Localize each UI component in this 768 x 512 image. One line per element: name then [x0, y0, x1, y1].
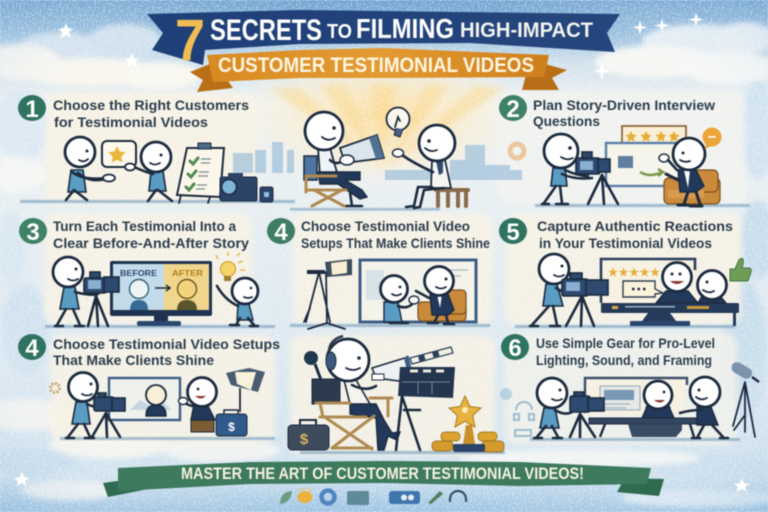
heading 5: Capture Authentic Reactions — [537, 218, 733, 234]
badge 3: 3 — [26, 219, 40, 246]
heading 6: Use Simple Gear for Pro-Level — [536, 335, 715, 351]
icon: blue case with dollar: $ — [228, 420, 235, 434]
heading 1 — [53, 97, 249, 130]
director chair — [316, 398, 392, 449]
icon: green thumbs up — [730, 258, 751, 281]
orange ribbon tails — [190, 60, 567, 92]
illustration: before and after monitor: BEFORE — [120, 268, 157, 278]
illustration: orange sofa with guest — [416, 266, 466, 324]
title line: filming: FILMING — [356, 13, 454, 44]
title banner — [147, 8, 620, 92]
badge 2 — [499, 95, 527, 123]
illustration: two laughing guests — [656, 262, 726, 303]
heading 3 — [53, 218, 249, 251]
center top illustration: director and interviewee — [304, 108, 468, 208]
badge 2: 2 — [506, 96, 520, 123]
heading 3: Clear Before-And-After Story — [53, 235, 249, 251]
trophy and coins — [432, 396, 504, 452]
city skyline — [233, 142, 522, 180]
pale side icons — [500, 388, 534, 436]
section 3 — [19, 218, 258, 326]
illustration: camera operator — [66, 372, 125, 438]
badge 5: 5 — [506, 219, 520, 246]
illustration: monitor with presenter — [109, 378, 180, 420]
illustration: camera operator — [53, 257, 119, 326]
title line: secrets: SECRETS — [210, 14, 322, 47]
illustration: interviewer — [380, 276, 419, 323]
heading 4 repeated: Choose Testimonial Video Setups — [53, 336, 280, 352]
heading 4 repeated — [53, 336, 280, 368]
lightbulb — [386, 108, 410, 137]
icon: bulb — [298, 488, 312, 503]
illustration: pointing figure — [217, 278, 258, 326]
heading 2: Questions — [533, 113, 600, 129]
section 4 repeated — [18, 334, 280, 438]
illustration: studio light — [304, 259, 352, 329]
illustration: review monitor — [601, 259, 739, 326]
badge 5 — [499, 218, 527, 246]
icon: gear — [510, 144, 524, 158]
section 4 — [267, 218, 490, 329]
illustration: checklist board — [177, 143, 224, 203]
icon: headset — [450, 491, 466, 502]
director chair — [306, 176, 346, 206]
heading 4: Setups That Make Clients Shine — [301, 235, 490, 251]
icon: orange speech bubble — [702, 128, 722, 149]
heading 4 — [301, 218, 490, 251]
badge 1 — [18, 95, 46, 123]
badge 4 repeated: 4 — [25, 335, 39, 362]
illustration: camera operator — [530, 254, 608, 326]
heading 4 repeated: That Make Clients Shine — [53, 352, 214, 368]
badge 4 — [267, 218, 295, 246]
subtitle: CUSTOMER TESTIMONIAL VIDEOS — [218, 54, 534, 77]
badge 3 — [19, 218, 47, 246]
central sunburst glow — [234, 40, 534, 190]
icon: blue case with dollar — [216, 410, 247, 436]
icon: tan gear — [50, 384, 60, 392]
badge 1: 1 — [25, 96, 39, 123]
icon: leaf — [280, 491, 292, 504]
ground shadows — [20, 200, 750, 454]
badge 6: 6 — [508, 335, 522, 362]
seated director — [304, 112, 367, 206]
heading 6 — [536, 335, 715, 368]
illustration: camera operator — [534, 378, 604, 438]
heading 2: Plan Story-Driven Interview — [533, 97, 715, 113]
illustration: desk and guests — [589, 377, 728, 438]
icon: dark case with dollar — [288, 420, 329, 450]
heading 6: Lighting, Sound, and Framing — [536, 352, 712, 368]
badge 4: 4 — [274, 219, 288, 246]
illustration: boom microphone — [729, 360, 759, 437]
camera tripod — [396, 396, 420, 450]
seated director — [326, 336, 400, 450]
badge 4 repeated — [18, 334, 46, 362]
section 6 — [500, 334, 759, 438]
badge 6 — [501, 334, 529, 362]
illustration: review monitor: ★★★★★ — [608, 267, 660, 279]
bottom green banner — [103, 461, 664, 497]
ribbon tails — [103, 478, 664, 497]
navy ribbon — [147, 10, 620, 65]
chair back — [312, 379, 340, 404]
banner text: MASTER THE ART OF CUSTOMER TESTIMONIAL VIDEOS! — [181, 465, 584, 483]
illustration: speaker on sofa — [659, 138, 720, 206]
icon: gear — [322, 490, 334, 504]
heading 1: for Testimonial Videos — [54, 114, 208, 130]
title line: high-impact: HIGH-IMPACT — [460, 19, 593, 42]
illustration: before and after monitor: AFTER — [172, 268, 203, 278]
heading 2 — [533, 97, 715, 129]
bottom icon row — [280, 488, 466, 505]
title line: to: TO — [327, 21, 352, 43]
heading 3: Turn Each Testimonial Into a — [53, 218, 236, 234]
illustration: camera operator — [542, 134, 618, 204]
heading 5: in Your Testimonial Videos — [539, 235, 712, 251]
numeral 7: 7 — [175, 8, 205, 73]
illustration: camera and bag — [220, 173, 273, 202]
soft panels backing — [44, 92, 745, 455]
seated interviewee — [392, 125, 468, 208]
icon: pill — [389, 491, 420, 504]
heading 1: Choose the Right Customers — [53, 97, 249, 113]
heading 5 — [537, 218, 733, 251]
orange ribbon — [207, 48, 549, 82]
ribbon body — [118, 461, 651, 491]
illustration: before and after monitor — [110, 261, 212, 326]
section 2 — [499, 95, 722, 206]
center bottom illustration: director with megaphone — [288, 336, 504, 452]
section 1 — [18, 95, 273, 203]
illustration: seated guest — [178, 378, 216, 432]
illustration: screen with stars — [606, 126, 686, 186]
icon: dark case with dollar: $ — [300, 431, 309, 448]
illustration: softbox light — [226, 368, 265, 412]
section 5 — [499, 218, 751, 326]
clapperboard — [398, 347, 455, 398]
microphone — [302, 349, 321, 380]
illustration: monitor — [360, 260, 476, 322]
icon: yellow lightbulb — [216, 252, 245, 281]
megaphone — [340, 135, 384, 165]
heading 4: Choose Testimonial Video — [301, 218, 470, 234]
megaphone — [372, 355, 416, 384]
icon: pencil — [428, 491, 443, 504]
icon: box — [347, 491, 369, 505]
illustration: two people holding star sign — [65, 137, 172, 201]
illustration: presentation screen — [585, 378, 687, 415]
